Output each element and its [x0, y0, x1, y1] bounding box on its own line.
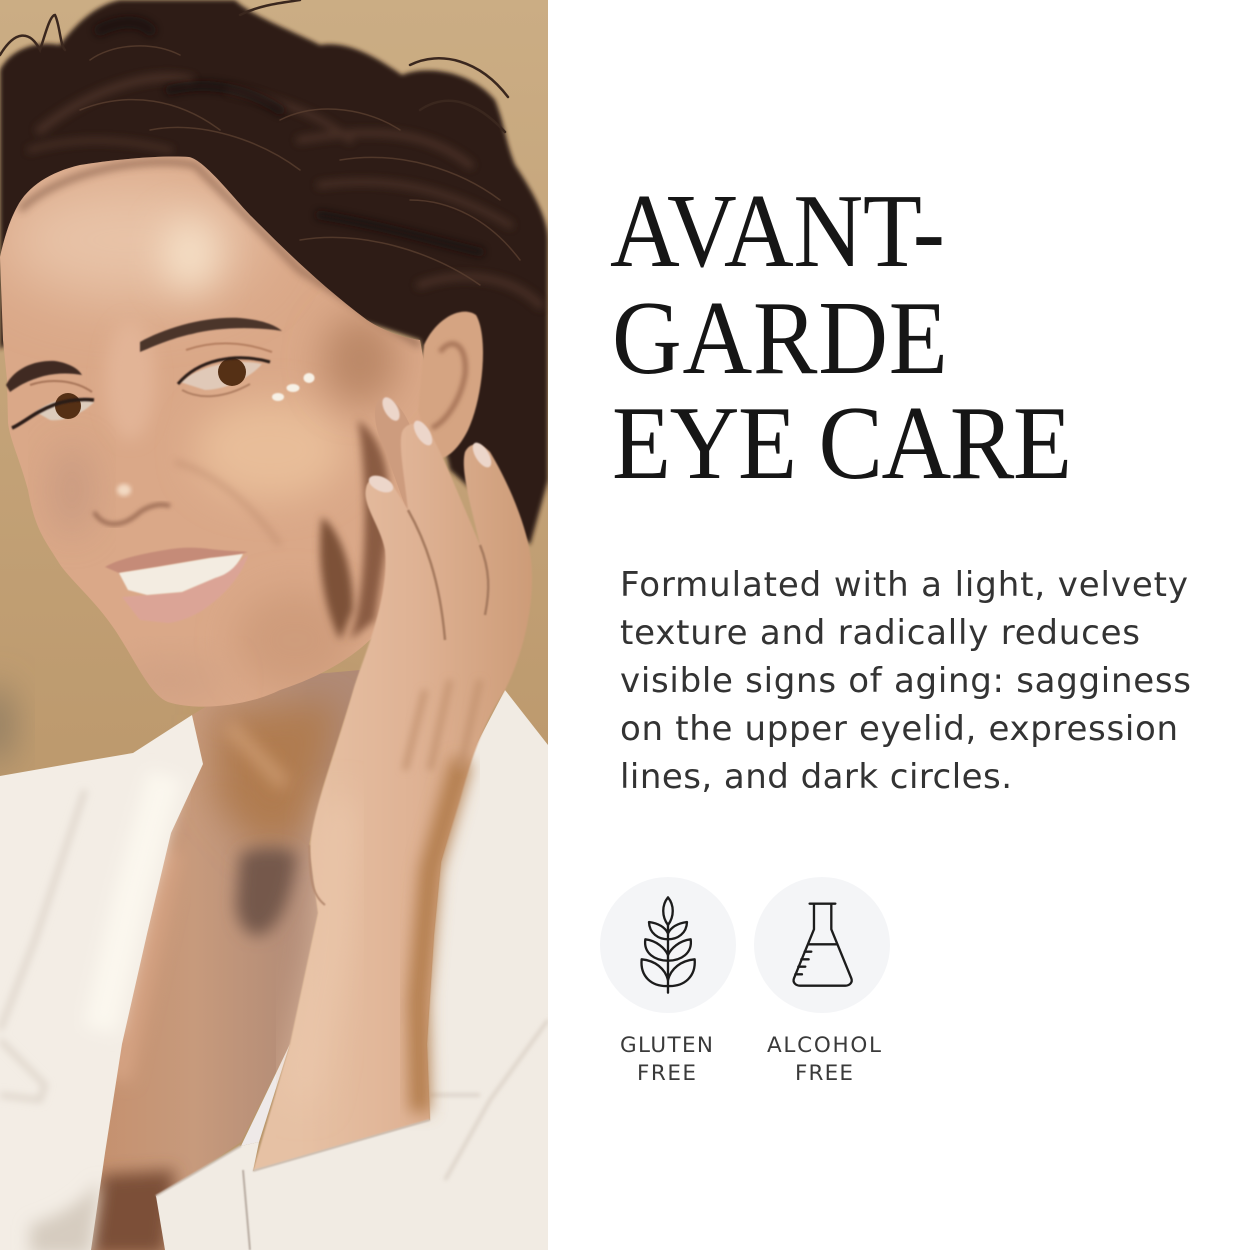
jacket left — [0, 715, 203, 1250]
title: AVANT- — [610, 172, 945, 289]
neck and chest — [91, 670, 360, 1250]
neck shade — [215, 700, 340, 850]
arm dark side — [418, 760, 462, 1112]
title: GARDE — [612, 279, 948, 396]
icon circle: gluten free — [600, 877, 736, 1013]
photo background — [0, 0, 548, 1250]
nose — [94, 484, 170, 524]
hand — [253, 394, 532, 1171]
left eyebrow — [6, 361, 82, 392]
teeth — [119, 554, 243, 595]
ear inner shading — [432, 344, 465, 428]
finger behind: index — [376, 406, 409, 507]
description text: on the upper eyelid, expression — [620, 709, 1178, 749]
photo: woman applying eye cream — [0, 0, 548, 1250]
wrist crease — [309, 845, 325, 905]
label: gluten free — [620, 1033, 713, 1086]
right eye — [178, 343, 272, 396]
lips — [105, 548, 248, 623]
right eyebrow — [140, 318, 282, 352]
cuff crease — [243, 1170, 250, 1250]
label: alcohol free — [767, 1033, 881, 1086]
cuff edge — [156, 1120, 430, 1196]
hand tendon shading — [405, 680, 480, 770]
left eye — [12, 381, 94, 428]
title: EYE CARE — [612, 384, 1072, 501]
face — [0, 157, 445, 707]
lapel fold lines — [0, 790, 85, 1100]
finger separations — [408, 510, 488, 640]
background dark blob — [0, 685, 13, 765]
nails — [366, 394, 495, 496]
neck hollow shadow — [236, 848, 298, 935]
jacket right folds — [430, 1020, 548, 1180]
hair strands — [0, 0, 540, 305]
icon: flask — [794, 904, 852, 986]
icon circle: alcohol free — [754, 877, 890, 1013]
lapel brighter band — [100, 775, 165, 1030]
description text: Formulated with a light, velvety — [620, 565, 1188, 605]
label: alcohol free: FREE — [795, 1061, 853, 1086]
badge: alcohol free — [754, 877, 890, 1086]
chest bright stripe — [118, 850, 170, 1080]
arm light highlight — [300, 800, 340, 1100]
description text: visible signs of aging: sagginess — [620, 661, 1191, 701]
description text: lines, and dark circles. — [620, 757, 1012, 797]
face tones — [0, 162, 420, 700]
jacket lower-left shadow — [30, 1180, 100, 1250]
hair edge shadow on forehead — [20, 162, 420, 345]
badge: gluten free — [600, 877, 736, 1086]
label: gluten free: GLUTEN — [620, 1033, 713, 1058]
label: alcohol free: ALCOHOL — [767, 1033, 881, 1058]
ear — [418, 312, 483, 459]
description text — [620, 565, 1191, 797]
hair mass — [0, 0, 548, 545]
label: gluten free: FREE — [637, 1061, 696, 1086]
icon: wheat — [642, 897, 695, 993]
hand and arm shape — [253, 424, 532, 1171]
neck light stripe — [228, 725, 285, 785]
hand shadow on cheek — [320, 517, 353, 640]
jacket right — [156, 690, 548, 1250]
cream dots — [272, 373, 314, 401]
description text: texture and radically reduces — [620, 613, 1140, 653]
chest lower shadow — [85, 1170, 175, 1250]
title — [610, 172, 1072, 501]
white gap between chest and arm — [241, 1044, 290, 1146]
nasolabial fold — [175, 462, 280, 545]
